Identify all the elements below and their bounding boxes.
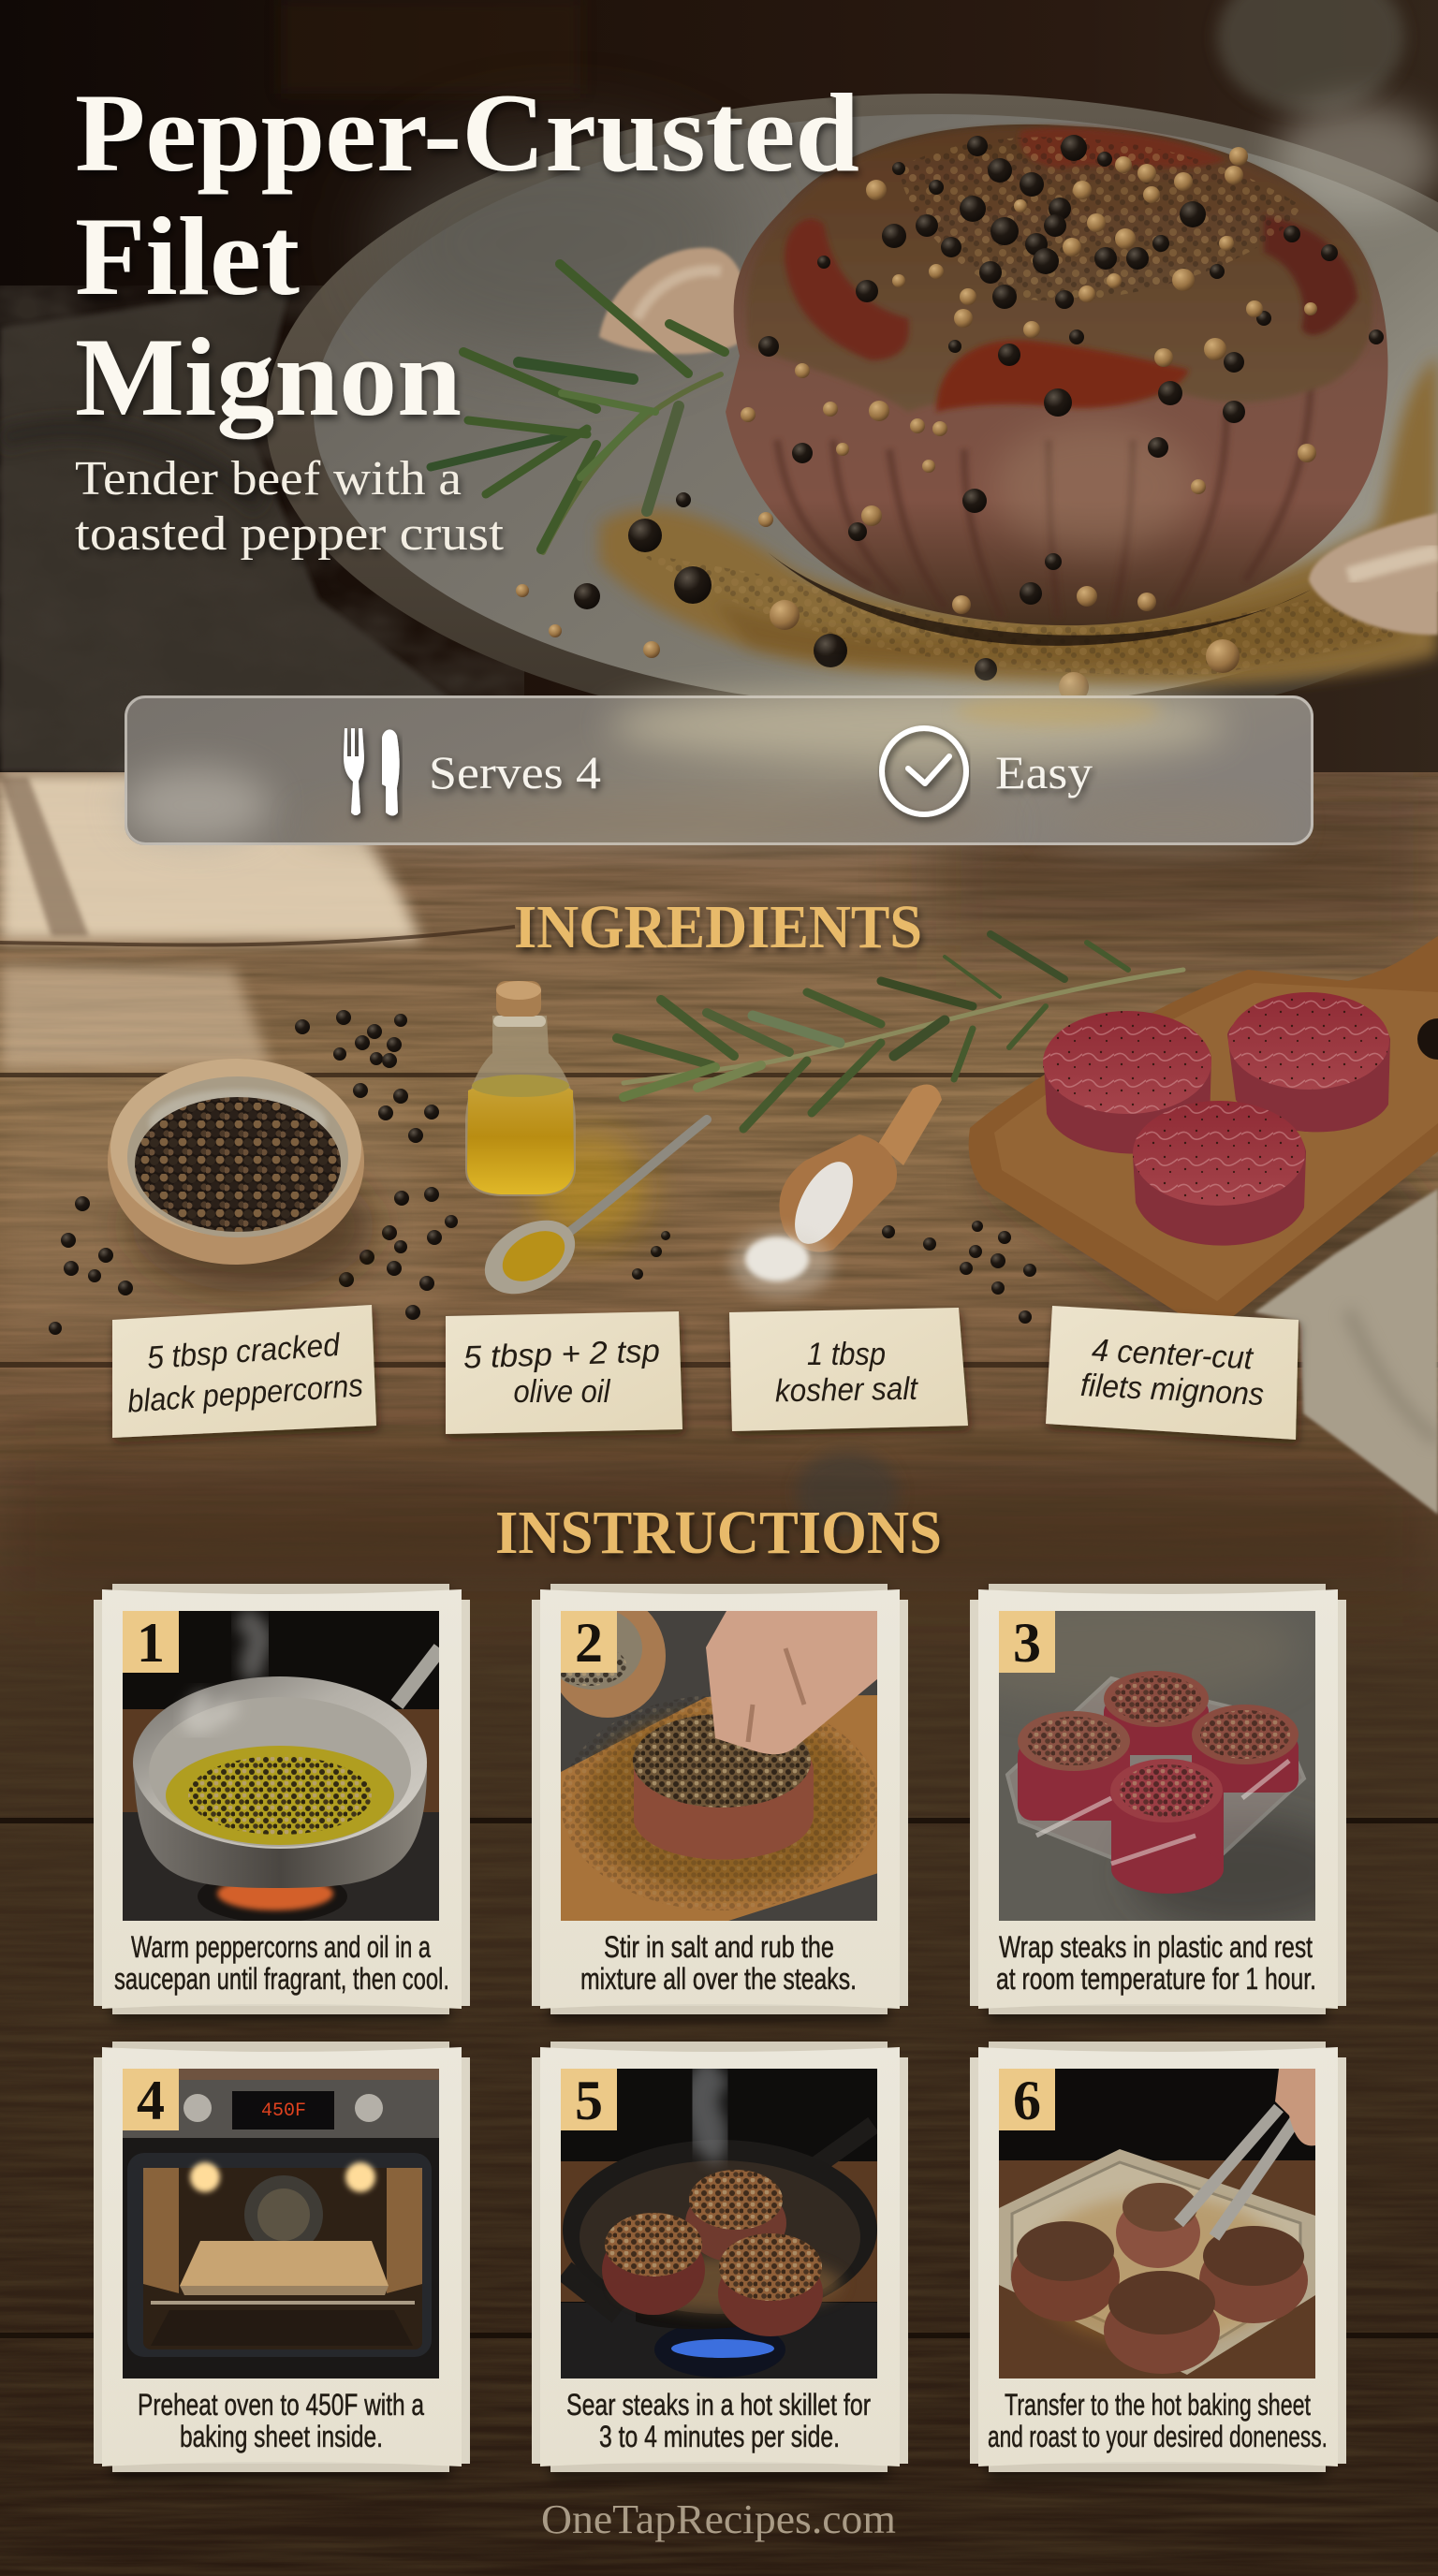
ingredient note: filets (1046, 1306, 1299, 1440)
step 4 number badge (123, 2069, 179, 2131)
step 1 caption: Warm peppercorns and oil in a (131, 1930, 431, 1964)
ingredient note: olive oil (446, 1311, 682, 1434)
spoon with oil (472, 1120, 707, 1309)
title: Filet (75, 194, 300, 318)
heading: ingredients: INGREDIENTS (514, 893, 922, 961)
cutting board (969, 936, 1438, 1348)
difficulty text: Easy (995, 746, 1093, 798)
step 4 caption: baking sheet inside. (180, 2420, 383, 2453)
step card 2 (532, 1584, 908, 2014)
ingredient note: filets: filets mignons (1079, 1368, 1265, 1412)
step 6 caption: Transfer to the hot baking sheet (1005, 2388, 1311, 2422)
steak (726, 124, 1387, 646)
icon: fork and knife (344, 728, 400, 816)
ingredient note: olive oil: 5 tbsp + 2 tsp (462, 1333, 661, 1376)
ingredient note: olive oil: olive oil (513, 1374, 611, 1410)
ingredient note: filets: 4 center-cut (1091, 1333, 1255, 1377)
step 3 number badge: 3 (1013, 1612, 1041, 1674)
bowl of peppercorns (108, 1059, 374, 1292)
heading: instructions: INSTRUCTIONS (495, 1499, 942, 1567)
cloth napkin (0, 285, 524, 772)
panel: ingredient still life (49, 934, 1438, 1515)
step 4 caption (138, 2388, 424, 2453)
panel: hero (0, 0, 1438, 772)
subtitle: toasted pepper crust (75, 507, 505, 561)
ingredient note: peppercorns: black peppercorns (126, 1368, 364, 1420)
salt pile (730, 1230, 833, 1297)
step 6 number badge (999, 2069, 1055, 2131)
step 2 number badge (561, 1611, 617, 1674)
step 4 number badge: 4 (137, 2070, 165, 2131)
title: Pepper-Crusted (75, 70, 859, 195)
steak peppercorns (758, 135, 1384, 605)
subtitle (75, 452, 505, 561)
step 3 number badge (999, 1611, 1055, 1674)
step 1 caption (114, 1930, 449, 1996)
step card 3 (924, 1584, 1355, 2014)
step 2 number badge: 2 (575, 1612, 603, 1674)
step 6 photo: roasting tray (999, 2069, 1315, 2378)
step 5 caption: Sear steaks in a hot skillet for (566, 2388, 871, 2422)
step 3 caption: Wrap steaks in plastic and rest (999, 1930, 1313, 1964)
step card 4 (94, 2042, 470, 2472)
ingredient note: salt (729, 1308, 968, 1431)
sauce pool (599, 356, 1438, 687)
plate (266, 94, 1438, 739)
ingredient note: salt: 1 tbsp (807, 1337, 886, 1372)
icon: check clock (882, 728, 966, 814)
serves text: Serves 4 (429, 746, 601, 798)
step 5 caption (566, 2388, 871, 2453)
linen cloth (1255, 1189, 1438, 1515)
step 6 caption (988, 2388, 1328, 2453)
step 1 caption: saucepan until fragrant, then cool. (114, 1962, 449, 1996)
rosemary sprig (431, 264, 725, 552)
title (75, 70, 859, 440)
footer website: OneTapRecipes.com (541, 2496, 896, 2542)
title: Mignon (75, 315, 462, 440)
step 3 caption (996, 1930, 1316, 1996)
olive oil bottle (465, 981, 646, 1245)
step card 5 (532, 2042, 908, 2472)
ingredient note: peppercorns (112, 1305, 376, 1438)
step 5 photo: searing skillet (561, 2069, 877, 2378)
ingredient note: peppercorns: 5 tbsp cracked (146, 1327, 342, 1376)
raw filet steaks (1043, 992, 1390, 1246)
step 3 caption: at room temperature for 1 hour. (996, 1962, 1316, 1996)
step 5 number badge: 5 (575, 2070, 603, 2131)
step 5 caption: 3 to 4 minutes per side. (599, 2420, 840, 2453)
step 2 caption (580, 1930, 857, 1996)
step 1 number badge: 1 (137, 1612, 165, 1674)
step 4 photo: oven: 450F (261, 2100, 306, 2122)
garlic clove (599, 248, 747, 354)
step 2 photo: seasoning steak (545, 1594, 879, 1929)
step card 1 (94, 1584, 470, 2014)
step 4 photo: oven (123, 2069, 439, 2378)
step 1 photo: saucepan (123, 1611, 440, 1923)
subtitle: Tender beef with a (75, 452, 462, 505)
step 2 caption: Stir in salt and rub the (604, 1930, 834, 1964)
scattered peppercorns (49, 1010, 1036, 1335)
step 5 number badge (561, 2069, 617, 2131)
garlic clove right (1309, 513, 1438, 635)
step 1 number badge (123, 1611, 179, 1674)
step card 6 (970, 2042, 1346, 2472)
panel: wood background (0, 772, 1438, 2576)
step 4 caption: Preheat oven to 450F with a (138, 2388, 424, 2422)
plate peppercorns (516, 492, 1240, 702)
panel: serves and difficulty bar (122, 690, 1313, 846)
rosemary sprig (617, 934, 1183, 1129)
ingredient note: salt: kosher salt (775, 1371, 919, 1409)
wooden salt scoop (779, 1085, 942, 1253)
step 3 photo: wrapped steaks (924, 1592, 1355, 1929)
step 2 caption: mixture all over the steaks. (580, 1962, 857, 1996)
step 6 number badge: 6 (1013, 2070, 1041, 2131)
